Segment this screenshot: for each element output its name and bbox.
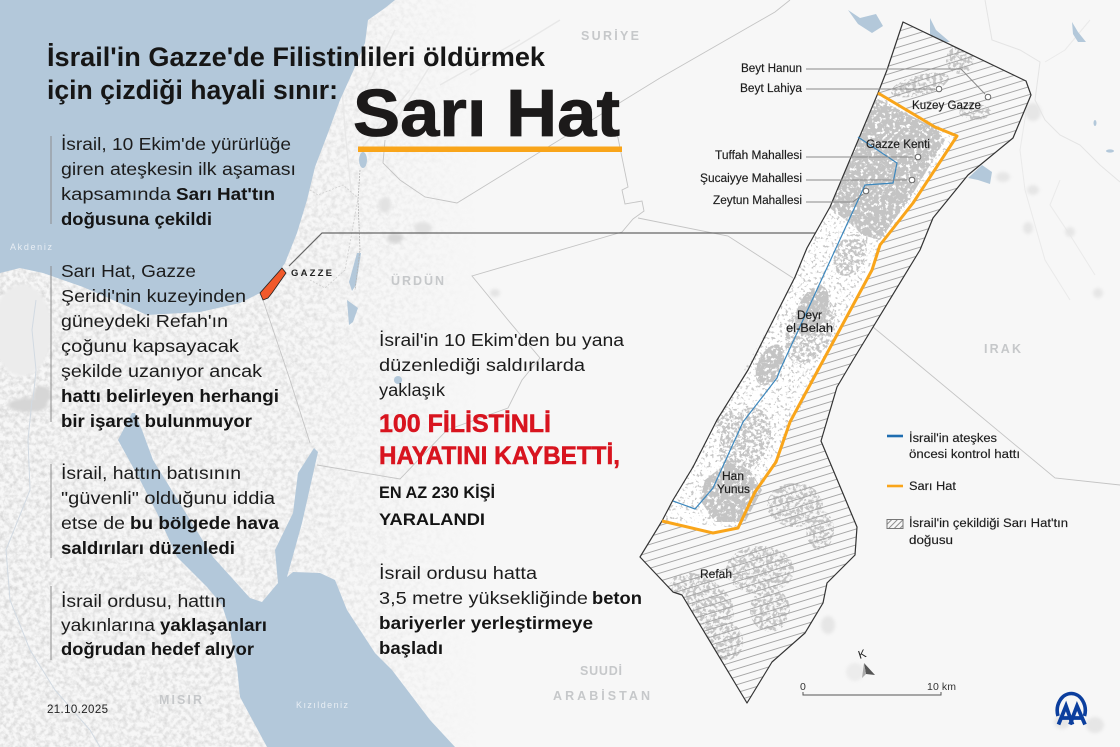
location labels and leader lines: Deyr xyxy=(797,310,822,322)
date: 21.10.2025 xyxy=(47,704,108,716)
sparse built-up specks xyxy=(662,93,957,528)
area west of the yellow line xyxy=(662,93,957,533)
location labels and leader lines: Kuzey Gazze xyxy=(912,100,981,112)
legend: öncesi kontrol hattı xyxy=(909,449,1020,461)
location labels and leader lines: Han xyxy=(722,471,744,483)
legend: Sarı Hat xyxy=(909,481,957,493)
heading: Sarı Hat: Sarı Hat xyxy=(353,76,620,151)
title xyxy=(47,42,545,105)
location labels and leader lines: Beyt Lahiya xyxy=(740,83,803,95)
urban areas: dense xyxy=(700,98,945,522)
text block: air strikes: "güvenli" olduğunu iddia xyxy=(61,488,275,508)
red casualty figure: 100 FİLİSTİNLİ xyxy=(379,410,551,438)
urban areas: scattered xyxy=(660,46,991,669)
text block: barriers xyxy=(379,563,642,658)
north arrow: K xyxy=(857,648,868,662)
text block: barriers: 3,5 metre yüksekliğinde xyxy=(379,588,588,608)
location labels and leader lines: Gazze Kenti xyxy=(866,139,930,151)
text block: line extent: güneydeki Refah'ın xyxy=(61,311,228,331)
strip outline xyxy=(640,22,1031,703)
text block: barriers: bariyerler yerleştirmeye xyxy=(379,613,593,633)
legend: doğusu xyxy=(909,535,953,547)
red casualty figure: HAYATINI KAYBETTİ, xyxy=(379,442,620,470)
text block: withdrawal: İsrail, 10 Ekim'de yürürlüğe xyxy=(61,134,291,154)
text block: casualties: İsrail'in 10 Ekim'den bu yana xyxy=(379,330,624,350)
country and sea labels: ARABİSTAN xyxy=(553,688,652,703)
country and sea labels: SURİYE xyxy=(581,28,641,43)
yellow line xyxy=(662,93,957,533)
location labels and leader lines: Refah xyxy=(700,569,732,581)
text block: casualties: düzenlediği saldırılarda xyxy=(379,355,585,375)
legend: İsrail'in çekildiği Sarı Hat'tın xyxy=(909,517,1068,530)
scale bar: 10 km xyxy=(927,681,956,693)
country and sea labels: Akdeniz xyxy=(10,242,52,252)
Nile delta and valley xyxy=(0,197,500,412)
text block: withdrawal: kapsamında xyxy=(61,184,171,204)
text block: line extent: Sarı Hat, Gazze xyxy=(61,261,196,281)
text block: barriers: beton xyxy=(592,588,642,608)
text block: targeting: yakınlarına xyxy=(61,615,155,635)
country and sea labels: GAZZE xyxy=(291,268,332,279)
strip base xyxy=(640,22,1031,703)
connector line from Gaza to detail map xyxy=(289,233,816,266)
text block: air strikes: etse de xyxy=(61,513,125,533)
country and sea labels: Kızıldeniz xyxy=(296,700,348,710)
text block: line extent xyxy=(50,261,279,431)
sea: Mediterranean xyxy=(0,0,395,315)
legend: İsrail'in ateşkes xyxy=(909,432,997,445)
text block: targeting xyxy=(50,586,267,660)
text block: withdrawal xyxy=(50,134,296,229)
location labels and leader lines: Tuffah Mahallesi xyxy=(715,150,802,162)
text block: line extent: şekilde uzanıyor ancak xyxy=(61,361,262,381)
text block: air strikes: saldırıları düzenledi xyxy=(61,538,235,558)
scale bar xyxy=(800,681,956,695)
text block: casualties xyxy=(379,330,624,529)
text block: air strikes xyxy=(50,463,279,558)
text block: targeting: yaklaşanları xyxy=(160,615,267,635)
text block: withdrawal: doğusuna çekildi xyxy=(61,209,212,229)
icon: Gaza locator shape xyxy=(260,268,286,300)
text block: withdrawal: Sarı Hat'tın xyxy=(176,184,275,204)
text block: line extent: çoğunu kapsayacak xyxy=(61,336,239,356)
north arrow xyxy=(857,648,875,678)
pre-ceasefire control line xyxy=(673,137,897,509)
title: için çizdiği hayali sınır: xyxy=(47,75,338,105)
sea: Red Sea and gulfs xyxy=(118,413,455,747)
location labels and leader lines: Zeytun Mahallesi xyxy=(713,195,802,207)
location labels and leader lines: Şucaiyye Mahallesi xyxy=(700,173,802,185)
location labels and leader lines: Beyt Hanun xyxy=(741,63,802,75)
icon: AA logo xyxy=(1057,694,1085,724)
country borders xyxy=(263,0,1120,485)
scale bar: 0 xyxy=(800,681,806,693)
text block: line extent: bir işaret bulunmuyor xyxy=(61,411,252,431)
location labels and leader lines xyxy=(700,63,991,581)
text block: barriers: başladı xyxy=(379,638,443,658)
text block: casualties: YARALANDI xyxy=(379,510,485,529)
text block: line extent: Şeridi'nin kuzeyinden xyxy=(61,286,246,306)
legend xyxy=(887,432,1068,547)
country and sea labels: SUUDİ xyxy=(580,663,624,678)
hatched area east of the yellow line xyxy=(640,22,1031,703)
text block: targeting: İsrail ordusu, hattın xyxy=(61,591,226,611)
red casualty figure xyxy=(379,410,620,470)
text block: targeting: doğrudan hedef alıyor xyxy=(61,639,254,659)
title: İsrail'in Gazze'de Filistinlileri öldürmek xyxy=(47,42,545,72)
text block: air strikes: İsrail, hattın batısının xyxy=(61,463,241,483)
location labels and leader lines: el-Belah xyxy=(786,323,833,335)
location labels and leader lines: Yunus xyxy=(717,484,750,496)
text block: withdrawal: giren ateşkesin ilk aşaması xyxy=(61,159,296,179)
country and sea labels: MISIR xyxy=(159,693,204,707)
text block: barriers: İsrail ordusu hatta xyxy=(379,563,537,583)
text block: line extent: hattı belirleyen herhangi xyxy=(61,386,279,406)
text block: air strikes: bu bölgede hava xyxy=(130,513,279,533)
text block: casualties: yaklaşık xyxy=(379,380,445,400)
country and sea labels: ÜRDÜN xyxy=(391,273,446,288)
lakes xyxy=(347,10,1114,384)
text block: casualties: EN AZ 230 KİŞİ xyxy=(379,483,495,502)
detail map: Gaza Strip xyxy=(640,22,1031,703)
country and sea labels: IRAK xyxy=(984,342,1023,356)
